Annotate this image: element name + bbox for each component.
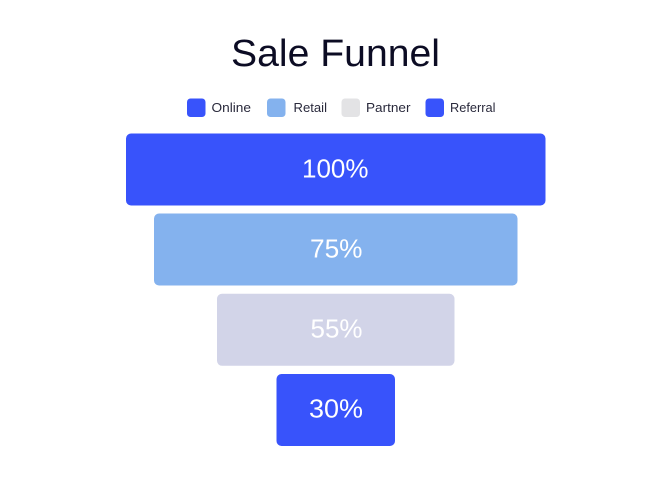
title: Sale Funnel [231, 33, 440, 75]
funnel bar: 100%: 100% [302, 154, 368, 184]
legend [187, 98, 496, 117]
legend item: Partner [342, 98, 411, 117]
legend item: Referral: Referral [450, 100, 496, 115]
funnel bar: 30% [276, 374, 395, 446]
legend item: Retail: Retail [294, 100, 327, 115]
legend item: Online: Online [212, 100, 251, 115]
funnel bar: 75%: 75% [310, 234, 362, 264]
legend item: Retail [267, 98, 327, 117]
funnel chart [126, 134, 546, 446]
funnel bar: 55% [217, 294, 454, 366]
funnel bar: 75% [154, 214, 518, 286]
legend item: Online [187, 98, 251, 117]
legend item: Referral [426, 98, 496, 117]
legend item: Partner: Partner [366, 100, 411, 115]
funnel bar: 30%: 30% [309, 394, 363, 424]
funnel bar: 55%: 55% [310, 314, 362, 344]
funnel bar: 100% [126, 134, 546, 206]
